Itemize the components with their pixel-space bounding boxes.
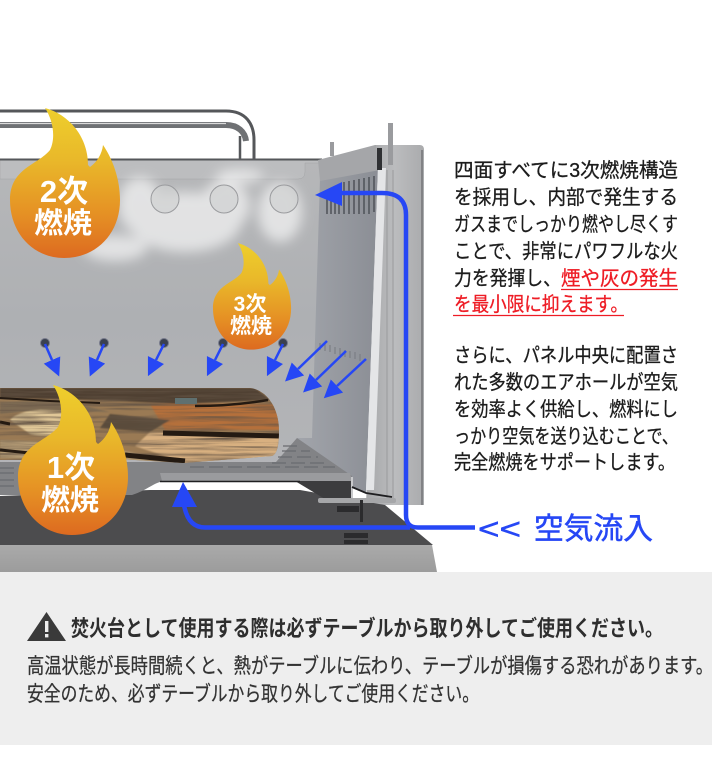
fold lines bbox=[387, 170, 393, 498]
panel foot shadow bbox=[352, 487, 392, 497]
vent slits bbox=[327, 176, 374, 214]
flame badge: 1st combustion: 燃焼 bbox=[41, 484, 99, 517]
text block: three-stage combustion: 力を発揮し、 bbox=[454, 267, 561, 290]
text block: three-stage combustion: 四面すべてに3次燃焼構造 bbox=[454, 159, 678, 182]
flame badge: 1st combustion: 1次 bbox=[47, 450, 95, 485]
perforated plate bbox=[0, 438, 352, 495]
flame badge: 3rd combustion: 3次 bbox=[234, 293, 266, 316]
rivet dots bbox=[40, 338, 288, 348]
icon: warning triangle bbox=[27, 612, 66, 641]
air inflow label: 空気流入 bbox=[534, 513, 653, 546]
back wall bbox=[0, 160, 326, 480]
side panel interior bbox=[297, 168, 378, 492]
dark line under plate bbox=[160, 480, 300, 482]
rim shadow bbox=[0, 158, 322, 160]
plate slots bbox=[0, 446, 335, 486]
flame badge: 3rd combustion bbox=[213, 243, 291, 350]
air inflow label: << bbox=[478, 513, 521, 546]
flame badge: 3rd combustion: 燃焼 bbox=[230, 315, 272, 338]
dark legs bbox=[337, 500, 368, 544]
text block: air holes: れた多数のエアホールが空気 bbox=[454, 371, 678, 394]
text block: three-stage combustion: を最小限に抑えます。 bbox=[454, 293, 628, 316]
log bbox=[0, 385, 285, 465]
panel: warning bbox=[0, 572, 712, 745]
text block: air holes bbox=[454, 344, 678, 474]
bottom metal runner bbox=[318, 498, 396, 503]
carrying handle bbox=[0, 111, 254, 160]
plate underside bbox=[295, 481, 352, 499]
air holes bbox=[151, 185, 298, 213]
plate bend edge bbox=[351, 477, 353, 499]
inflow arrows from holes bbox=[45, 341, 366, 386]
plate front band bbox=[160, 473, 352, 481]
white gap under plate bbox=[148, 482, 302, 490]
floor surface bbox=[0, 490, 433, 545]
text block: three-stage combustion bbox=[454, 159, 678, 316]
flame badge: 2nd combustion: 燃焼 bbox=[34, 207, 92, 240]
flame badge: 1st combustion bbox=[18, 385, 128, 535]
top rim of wall bbox=[0, 160, 322, 179]
air inflow label bbox=[478, 513, 653, 546]
red underline bbox=[453, 290, 678, 316]
text block: three-stage combustion: 煙や灰の発生 bbox=[561, 267, 678, 290]
front lip bbox=[0, 545, 437, 572]
lower vent slits bbox=[320, 343, 360, 361]
illustration: fire pit cross-section bbox=[0, 111, 475, 572]
flame badge: 2nd combustion bbox=[10, 108, 120, 258]
text block: air holes: さらに、パネル中央に配置さ bbox=[454, 344, 678, 367]
main air flow arrow bbox=[172, 182, 475, 528]
panel edge bbox=[421, 150, 423, 505]
text block: air holes: を効率よく供給し、燃料にし bbox=[454, 398, 678, 421]
right outer panel bbox=[366, 145, 424, 505]
flame badge: 2nd combustion: 2次 bbox=[40, 174, 88, 209]
text block: three-stage combustion: を採用し、内部で発生する bbox=[454, 186, 678, 209]
flap pins bbox=[330, 123, 393, 165]
smoke cloud bbox=[83, 169, 302, 261]
side panel top flap bbox=[318, 145, 380, 181]
text block: three-stage combustion: ことで、非常にパワフルな火 bbox=[454, 240, 678, 263]
bright folded edge bbox=[366, 168, 386, 490]
warning body line 2: 安全のため、必ずテーブルから取り外してご使用ください。 bbox=[27, 683, 479, 706]
text block: air holes: 完全燃焼をサポートします。 bbox=[454, 451, 675, 474]
dark latch bbox=[377, 148, 382, 170]
